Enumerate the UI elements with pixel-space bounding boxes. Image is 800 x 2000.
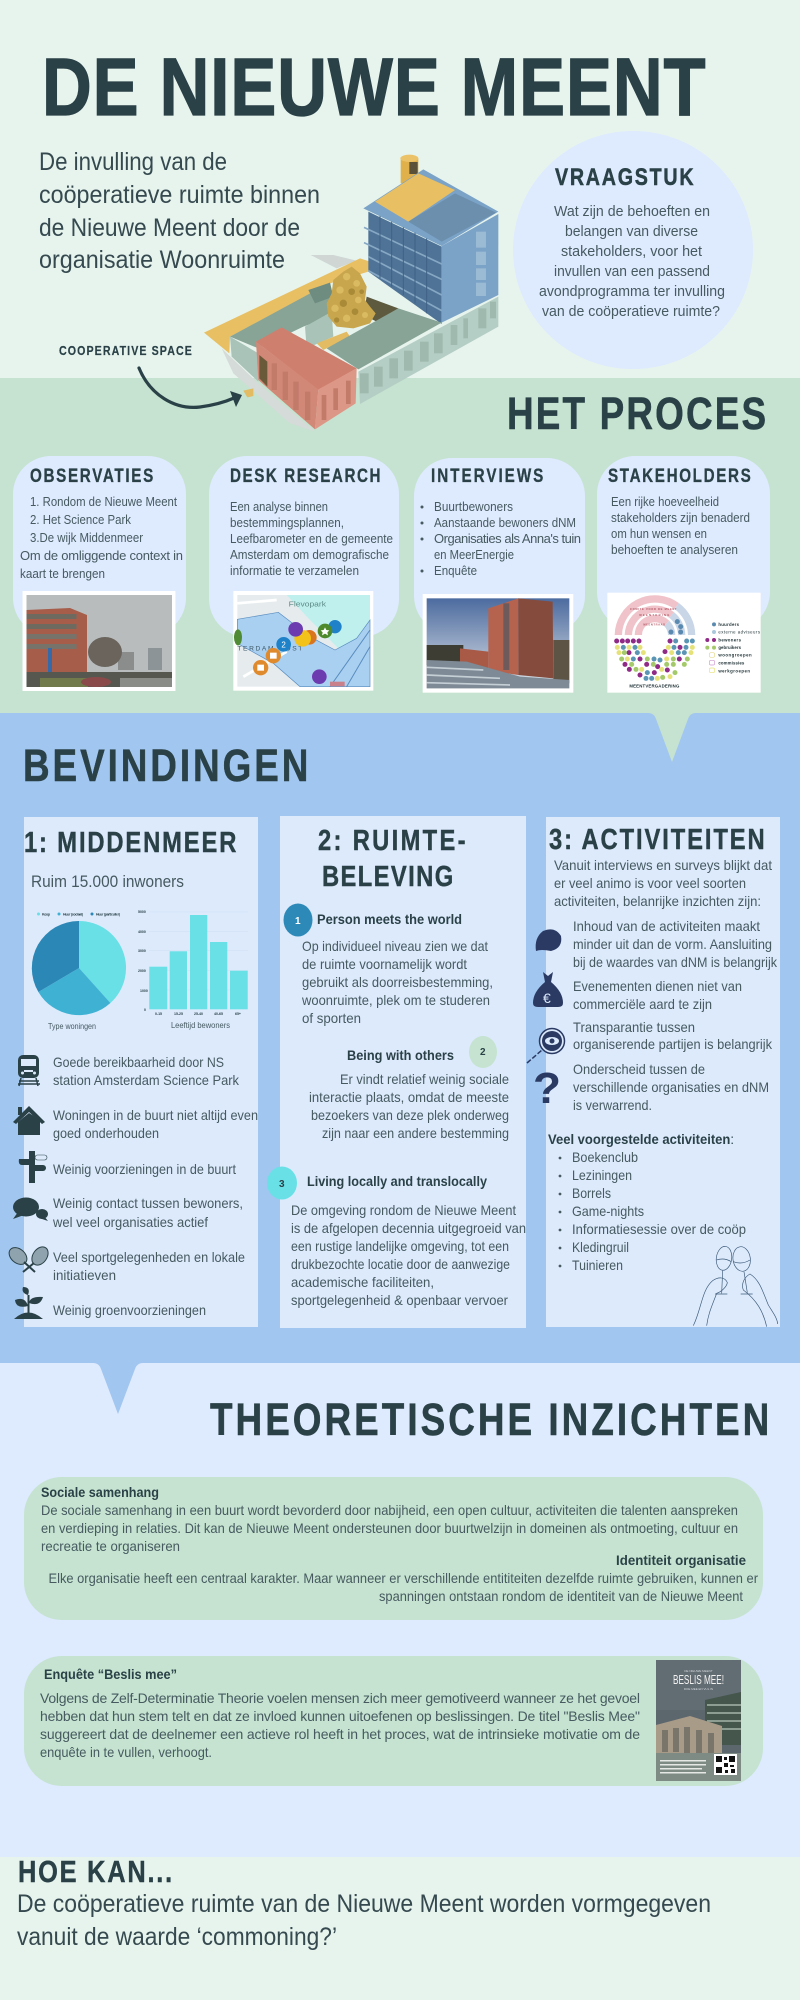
text: evenementen: Evenementen dienen niet van xyxy=(573,978,742,994)
text: being with others: zijn naar een andere bestemming xyxy=(322,1125,509,1141)
title: DE NIEUWE MEENT xyxy=(42,41,706,133)
diagram: meentvergadering: MEENTRAAD xyxy=(643,622,665,626)
text: woningen: goed onderhouden xyxy=(53,1125,159,1141)
icon: signpost xyxy=(19,1151,47,1183)
bar chart: leeftijd bewoners: 15-25 xyxy=(174,1012,183,1016)
map: Flevopark: 2 xyxy=(281,640,286,649)
heading: 2 ruimte-beleving: 2: RUIMTE- xyxy=(318,824,466,857)
text: intro activiteiten xyxy=(554,857,772,909)
text: sociale samenhang xyxy=(41,1485,738,1554)
icon: blob xyxy=(536,929,561,951)
text: desk research: informatie te verzamelen xyxy=(230,563,359,578)
chimney xyxy=(400,155,418,183)
text: vraagstuk question: stakeholders, voor het xyxy=(561,244,702,260)
panel: 1 middenmeer xyxy=(6,817,258,1327)
arrow: to cooperative space xyxy=(139,368,242,407)
text: identiteit organisatie xyxy=(48,1553,758,1604)
intro text: coöperatieve ruimte binnen xyxy=(39,181,320,209)
icon: train xyxy=(18,1055,40,1086)
text: interviews list: en MeerEnergie xyxy=(434,547,514,562)
text: inhoud: bij de waardes van dNM is belangrijk xyxy=(573,954,778,970)
text: contact: Weinig contact tussen bewoners, xyxy=(53,1195,243,1211)
text: living locally and translocally: academische faciliteiten, xyxy=(291,1274,434,1290)
arrow: blue section pointer xyxy=(93,1363,143,1414)
badge: 3: 3 xyxy=(279,1179,285,1190)
text: living locally and translocally: is de afgelopen decennia uitgegroeid van xyxy=(291,1220,526,1236)
photo: toren xyxy=(423,594,573,693)
panel: stakeholders xyxy=(597,456,770,693)
text: stakeholders: stakeholders zijn benaderd xyxy=(611,510,750,525)
text: sociale samenhang: en verdieping in relaties. Dit kan de Nieuwe Meent ondersteunen door buurtwelzijn in domeinen als ontmoeting, cultuur en xyxy=(41,1520,738,1536)
heading: desk research: DESK RESEARCH xyxy=(230,464,381,486)
text: contact: wel veel organisaties actief xyxy=(52,1214,208,1230)
bar chart: leeftijd bewoners: 1000 xyxy=(140,989,148,993)
text: transparantie: organiserende partijen is belangrijk xyxy=(573,1036,773,1052)
bar chart: leeftijd bewoners: Leeftijd bewoners xyxy=(171,1021,230,1030)
text: inwoners: Ruim 15.000 inwoners xyxy=(31,872,184,891)
text: observaties: 2. Het Science Park xyxy=(30,512,131,527)
pie chart: type woningen xyxy=(32,912,126,1031)
text: stakeholders: om hun wensen en xyxy=(611,526,707,541)
arrow: green section pointer xyxy=(648,713,696,762)
panel: vraagstuk circle xyxy=(513,131,753,369)
heading: observaties: OBSERVATIES xyxy=(30,464,153,486)
text: sociale samenhang: Sociale samenhang xyxy=(41,1485,159,1500)
text: enquête: enquête in te vullen, verhoogt. xyxy=(40,1744,212,1760)
text: vraagstuk question: Wat zijn de behoeften en xyxy=(554,204,710,220)
text: voorgestelde activiteiten: Game-nights xyxy=(572,1203,644,1219)
text: sociale samenhang: recreatie te organiseren xyxy=(41,1538,180,1554)
text: identiteit organisatie: Elke organisatie heeft een centraal karakter. Maar wanneer er verschillende entititeiten dezelfde ruimte gebruiken, kunnen er xyxy=(48,1570,758,1586)
text: person meets the world: de ruimte voornamelijk wordt xyxy=(302,956,467,972)
intro text: organisatie Woonruimte xyxy=(39,246,285,274)
text: person meets the world: Person meets the world xyxy=(317,912,462,927)
text: being with others: bezoekers van deze plek onderweg xyxy=(311,1107,509,1123)
text: voorgestelde activiteiten: Tuinieren xyxy=(572,1257,623,1273)
text: voorgestelde activiteiten: Borrels xyxy=(572,1185,611,1201)
bar chart: leeftijd bewoners: 65+ xyxy=(235,1012,241,1016)
illustration: isometric building xyxy=(204,155,498,432)
text: desk research: Amsterdam om demografische xyxy=(230,547,389,562)
diagram: meentvergadering: bewoners xyxy=(718,637,742,642)
text: woningen: Woningen in de buurt niet altijd even xyxy=(53,1107,258,1123)
intro text xyxy=(39,148,320,274)
text: identiteit organisatie: Identiteit organisatie xyxy=(616,1553,746,1568)
text: bereikbaarheid xyxy=(53,1054,240,1088)
pie chart: type woningen: Huur (sociaal) xyxy=(63,912,83,916)
intro text: De invulling van de xyxy=(39,148,227,176)
badge: 2 xyxy=(469,1036,497,1068)
icon: question mark: ? xyxy=(533,1064,561,1113)
text: voorgestelde activiteiten: Informatiesessie over de coöp xyxy=(572,1221,746,1237)
text: woningen xyxy=(53,1107,258,1141)
text: desk research: Leefbarometer en de gemeente xyxy=(230,531,393,546)
diagram: meentvergadering: MEENTVERGADERING xyxy=(629,684,680,689)
text: onderscheid xyxy=(573,1061,769,1113)
text: observaties xyxy=(20,494,183,581)
icon: chat bubbles xyxy=(13,1198,48,1221)
text: voorgestelde activiteiten: Veel voorgestelde activiteiten: xyxy=(548,1132,734,1147)
text: onderscheid: Onderscheid tussen de xyxy=(573,1061,705,1077)
panel: sociale samenhang en identiteit xyxy=(24,1477,763,1620)
text: enquête: suggereert dat de deelnemer een actieve rol heeft in het proces, wat de intrinsieke motivatie om de xyxy=(40,1726,640,1742)
heading: 3 activiteiten: 3: ACTIVITEITEN xyxy=(549,823,765,856)
icon: house xyxy=(13,1106,45,1135)
text: intro activiteiten: Vanuit interviews en surveys blijkt dat xyxy=(554,857,772,873)
poster: beslis mee: DOE MEE EN VUL IN xyxy=(684,1687,713,1691)
text: transparantie: Transparantie tussen xyxy=(573,1019,695,1035)
diagram: meentvergadering: externe adviseurs xyxy=(718,630,760,635)
text: voorgestelde activiteiten xyxy=(548,1132,746,1273)
text: living locally and translocally: sportgelegenheid & openbaar vervoer xyxy=(291,1292,508,1308)
diagram: meentvergadering: COMITÉ VOOR DE MEENT xyxy=(630,606,677,611)
text: evenementen xyxy=(573,978,742,1012)
text: person meets the world: of sporten xyxy=(302,1010,361,1026)
illustration: toasting wine glasses xyxy=(693,1245,778,1327)
text: stakeholders: Een rijke hoeveelheid xyxy=(611,494,719,509)
text: interviews list: Buurtbewoners xyxy=(434,499,513,514)
panel: enquête beslis mee xyxy=(24,1656,763,1786)
text: bereikbaarheid: station Amsterdam Science Park xyxy=(53,1072,240,1088)
text: interviews list: Aanstaande bewoners dNM xyxy=(434,515,576,530)
poster: beslis mee xyxy=(656,1660,741,1781)
icon: money bag xyxy=(533,972,563,1007)
heading: stakeholders: STAKEHOLDERS xyxy=(608,464,751,486)
pie chart: type woningen: Huur (particulier) xyxy=(96,912,120,916)
text: desk research: bestemmingsplannen, xyxy=(230,515,344,530)
text: hoofdvraag: vanuit de waarde ‘commoning?’ xyxy=(17,1923,337,1951)
text: enquête: hebben dat hun stem telt en dat ze invloed kunnen uitoefenen op beslissingen. De titel "Beslis Mee" xyxy=(40,1708,640,1724)
intro text: de Nieuwe Meent door de xyxy=(39,214,300,242)
text: hoofdvraag: De coöperatieve ruimte van de Nieuwe Meent worden vormgegeven xyxy=(17,1890,711,1918)
text: desk research xyxy=(230,499,393,578)
text: voorzieningen: Weinig voorzieningen in de buurt xyxy=(53,1161,236,1177)
text: enquête: Volgens de Zelf-Determinatie Theorie voelen mensen zich meer gemotiveerd wanneer ze het gevoel xyxy=(40,1690,640,1706)
text: living locally and translocally: De omgeving rondom de Nieuwe Meent xyxy=(291,1202,516,1218)
text: vraagstuk question: van de coöperatieve ruimte? xyxy=(542,304,720,320)
text: observaties: 1. Rondom de Nieuwe Meent xyxy=(30,494,177,509)
text: stakeholders xyxy=(611,494,750,557)
text: intro activiteiten: er veel animo is voor veel soorten xyxy=(554,875,746,891)
diagram: meentvergadering: werkgroepen xyxy=(717,668,750,673)
icon: eye magnifier xyxy=(527,1028,564,1063)
text: identiteit organisatie: spanningen ontstaan rondom de identiteit van de Nieuwe Meent xyxy=(379,1588,743,1604)
text: sport xyxy=(53,1249,245,1283)
icon: money bag: € xyxy=(543,990,551,1006)
label: cooperative space: COOPERATIVE SPACE xyxy=(59,343,192,358)
poster: beslis mee: BESLIS MEE! xyxy=(673,1672,724,1687)
text: person meets the world: Op individueel niveau zien we dat xyxy=(302,938,488,954)
text: hoofdvraag xyxy=(17,1890,711,1951)
text: onderscheid: is verwarrend. xyxy=(573,1097,652,1113)
text: living locally and translocally: Living locally and translocally xyxy=(307,1174,487,1189)
text: groen: Weinig groenvoorzieningen xyxy=(53,1302,206,1318)
panel: observaties xyxy=(13,456,186,691)
map: Flevopark: Flevopark xyxy=(289,600,326,609)
text: evenementen: commerciële aard te zijn xyxy=(573,996,712,1012)
heading: hoe kan: HOE KAN... xyxy=(18,1855,172,1890)
bar chart: leeftijd bewoners xyxy=(138,910,248,1030)
badge: 2: 2 xyxy=(480,1047,486,1058)
text: interviews list: Organisaties als Anna's tuin xyxy=(434,531,581,546)
text: sociale samenhang: De sociale samenhang in een buurt wordt bevorderd door nabijheid, een open cultuur, activiteiten die talenten aanspreken xyxy=(41,1502,738,1518)
heading: bevindingen: BEVINDINGEN xyxy=(23,741,308,791)
heading: 2 ruimte-beleving xyxy=(318,824,466,893)
text: voorgestelde activiteiten: Boekenclub xyxy=(572,1149,638,1165)
panel: interviews xyxy=(414,458,585,693)
diagram: meentvergadering: gebruikers xyxy=(718,645,742,650)
text: person meets the world: gebruikt als doorreisbestemming, xyxy=(302,974,493,990)
text: desk research: Een analyse binnen xyxy=(230,499,328,514)
bar chart: leeftijd bewoners: 0-15 xyxy=(155,1012,162,1016)
badge: 1: 1 xyxy=(295,916,301,927)
text: vraagstuk question: avondprogramma ter invulling xyxy=(539,284,725,300)
text: interviews list xyxy=(420,499,581,578)
panel: 3 activiteiten xyxy=(527,817,780,1327)
icon: plant xyxy=(14,1287,43,1319)
text: vraagstuk question: belangen van diverse xyxy=(565,224,698,240)
bar chart: leeftijd bewoners: 0 xyxy=(144,1008,146,1012)
heading: theoretische inzichten: THEORETISCHE INZICHTEN xyxy=(210,1395,769,1445)
text: enquête xyxy=(40,1667,640,1760)
text: enquête: Enquête “Beslis mee” xyxy=(44,1667,177,1682)
text: observaties: 3.De wijk Middenmeer xyxy=(30,530,144,545)
text: observaties: kaart te brengen xyxy=(20,566,105,581)
text: sport: initiatieven xyxy=(53,1267,116,1283)
bar chart: leeftijd bewoners: 2000 xyxy=(138,969,146,973)
badge: 1 xyxy=(284,904,312,936)
text: inhoud: minder uit dan de vorm. Aansluiting xyxy=(573,936,772,952)
text: observaties: Om de omliggende context in xyxy=(20,548,183,563)
panel: 2 ruimtebeleving xyxy=(267,816,526,1328)
text: inhoud: Inhoud van de activiteiten maakt xyxy=(573,918,760,934)
text: onderscheid: verschillende organisaties en dNM xyxy=(573,1079,769,1095)
bar chart: leeftijd bewoners: 5000 xyxy=(138,910,146,914)
text: intro activiteiten: activiteiten, belanrijke inzichten zijn: xyxy=(554,893,761,909)
text: bereikbaarheid: Goede bereikbaarheid door NS xyxy=(53,1054,224,1070)
badge: 3 xyxy=(267,1166,297,1200)
text: stakeholders: behoeften te analyseren xyxy=(611,542,738,557)
text: voorgestelde activiteiten: Leziningen xyxy=(572,1167,632,1183)
bar chart: leeftijd bewoners: 4000 xyxy=(138,930,146,934)
tree xyxy=(327,267,376,328)
text: living locally and translocally: drukbezochte locatie door de aanwezige xyxy=(291,1256,510,1272)
text: vraagstuk question: invullen van een passend xyxy=(554,264,710,280)
poster: beslis mee: DE NIEUWE MEENT xyxy=(684,1669,713,1673)
bar chart: leeftijd bewoners: 3000 xyxy=(138,949,146,953)
map: Flevopark xyxy=(233,591,373,691)
map: Flevopark: TERDAM OOST xyxy=(237,646,302,653)
heading: 2 ruimte-beleving: BELEVING xyxy=(322,860,453,893)
pie chart: type woningen: Koop xyxy=(42,912,50,916)
diagram: meentvergadering: woongroepen xyxy=(717,653,752,658)
heading: het proces: HET PROCES xyxy=(507,389,766,439)
icon: tennis rackets xyxy=(6,1244,51,1272)
diagram: meentvergadering: huurders xyxy=(718,622,740,627)
panel: desk research xyxy=(209,456,399,691)
heading: 1 middenmeer: 1: MIDDENMEER xyxy=(24,826,236,859)
text: sport: Veel sportgelegenheden en lokale xyxy=(53,1249,245,1265)
text: contact xyxy=(52,1195,243,1230)
text: being with others: Being with others xyxy=(347,1048,454,1063)
heading: interviews: INTERVIEWS xyxy=(431,464,543,486)
text: interviews list: Enquête xyxy=(434,563,477,578)
photo: gebouw xyxy=(22,591,176,691)
text: voorgestelde activiteiten: Kledingruil xyxy=(572,1239,629,1255)
pie chart: type woningen: Type woningen xyxy=(48,1022,96,1031)
bar chart: leeftijd bewoners: 40-65 xyxy=(214,1012,223,1016)
diagram: meentvergadering xyxy=(607,593,761,693)
bar chart: leeftijd bewoners: 25-40 xyxy=(194,1012,203,1016)
text: person meets the world xyxy=(301,912,493,1026)
text: being with others: Er vindt relatief weinig sociale xyxy=(340,1071,509,1087)
text: living locally and translocally: een rustige landelijke omgeving, tot een xyxy=(291,1238,509,1254)
diagram: meentvergadering: commissies xyxy=(718,661,745,666)
text: being with others: interactie plaats, omdat de meeste xyxy=(309,1089,509,1105)
text: vraagstuk question xyxy=(539,204,725,320)
text: transparantie xyxy=(573,1019,773,1052)
text: inhoud xyxy=(573,918,778,970)
diagram: meentvergadering: MEENTKRING xyxy=(639,613,669,617)
text: person meets the world: woonruimte, plek om te studeren xyxy=(301,992,490,1008)
text: living locally and translocally xyxy=(291,1174,526,1308)
heading: vraagstuk: VRAAGSTUK xyxy=(555,163,694,190)
text: being with others xyxy=(309,1048,509,1141)
